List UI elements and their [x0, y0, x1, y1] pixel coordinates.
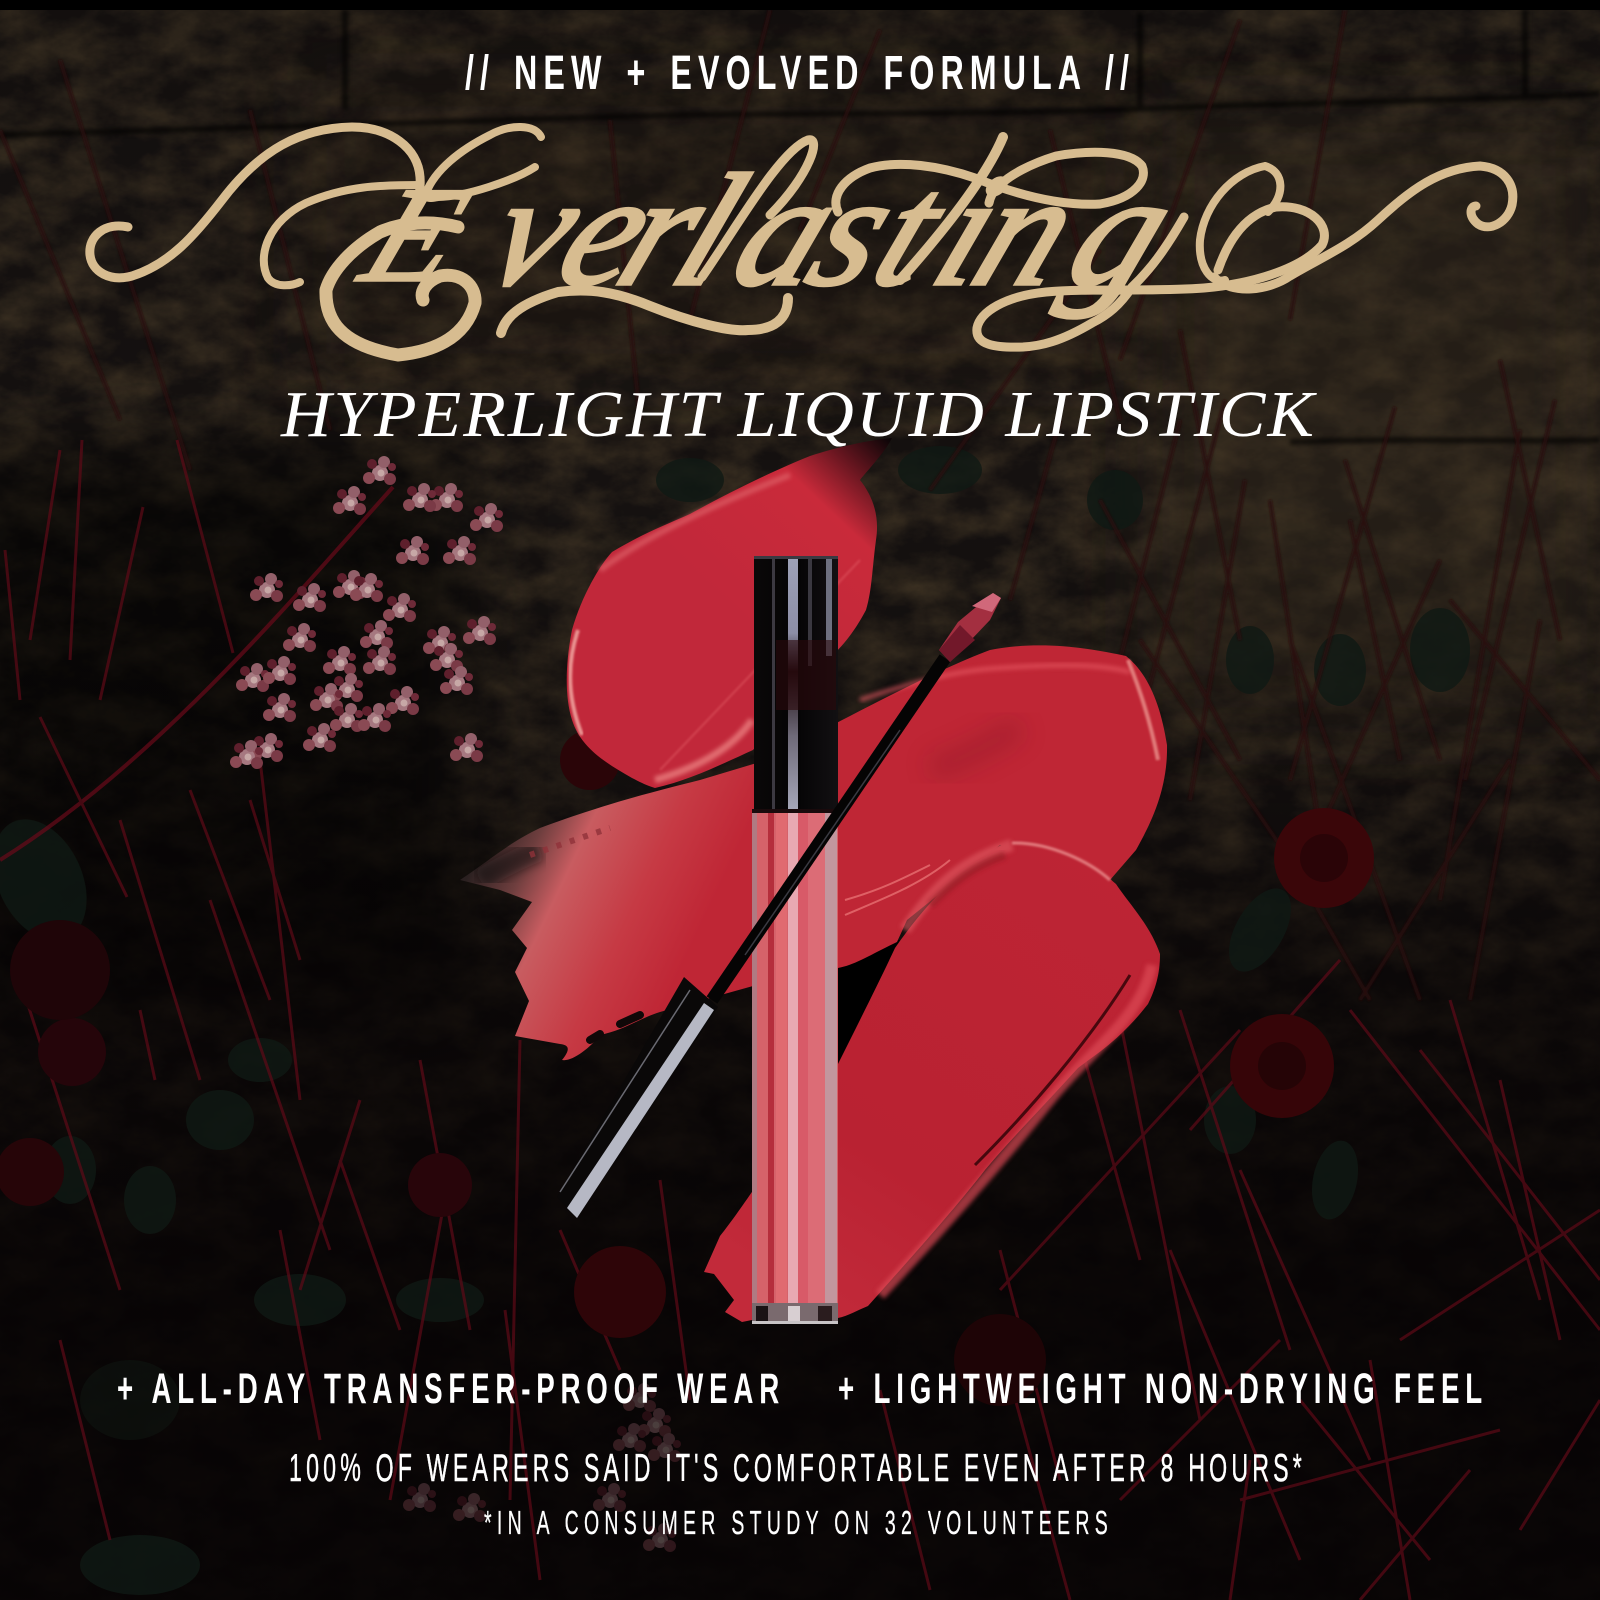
dark twigs on the wall: [0, 10, 1600, 1000]
applicator tip: [939, 593, 1001, 662]
lipstick smears: [460, 438, 1167, 1322]
title word: E: [343, 161, 488, 310]
leaves: [0, 446, 1470, 1595]
red roses: [0, 730, 1374, 1406]
smear highlights: [480, 475, 1158, 1295]
tube cap: [752, 556, 838, 813]
baby's breath flower cluster: [230, 456, 681, 1552]
smear: middle swatch: [460, 645, 1167, 1060]
benefit: transfer-proof wear: + ALL-DAY TRANSFER-PROOF WEAR: [117, 1365, 785, 1413]
title flourishes: [90, 127, 1513, 355]
title word: verlasting: [465, 142, 1199, 319]
footnote: *IN A CONSUMER STUDY ON 32 VOLUNTEERS: [484, 1504, 1113, 1541]
black top band: [0, 0, 1600, 10]
wand rod: [712, 658, 945, 1000]
tagline: // NEW + EVOLVED FORMULA //: [465, 47, 1135, 100]
title: Everlasting script: [90, 127, 1513, 355]
subtitle: HYPERLIGHT LIQUID LIPSTICK: [280, 378, 1317, 451]
red twigs: [0, 440, 1600, 1600]
tube body: [752, 813, 838, 1324]
smear: lower swatch: [704, 839, 1160, 1322]
wand handle: [557, 977, 718, 1218]
lipstick tube: [752, 556, 838, 1324]
smear: upper swatch: [567, 438, 892, 788]
applicator wand: [557, 593, 1001, 1218]
black shadow gap: [838, 940, 900, 1075]
